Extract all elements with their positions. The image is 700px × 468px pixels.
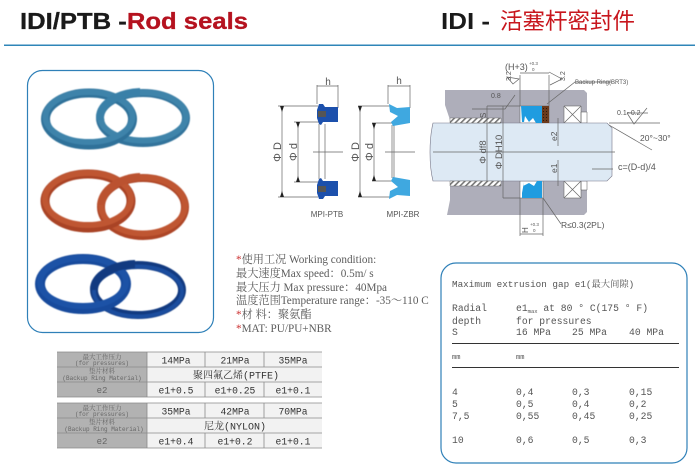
data rows: 0,15 — [629, 387, 652, 398]
row heads — [64, 403, 144, 447]
column heads: at 80 ° C(175 ° F) — [538, 303, 648, 314]
seal bottom — [522, 181, 542, 198]
row heads: e2 — [97, 386, 107, 396]
column heads: 40 MPa — [629, 327, 664, 338]
column heads: Radial — [452, 303, 487, 314]
seal section top — [317, 104, 338, 125]
row heads: (Backup Ring Material) — [64, 426, 144, 433]
bearing crosses — [564, 106, 581, 198]
data rows: 0,55 — [516, 411, 539, 422]
values: e1+0.1 — [276, 386, 311, 396]
seal section top — [389, 104, 410, 126]
values: 21MPa — [220, 356, 250, 366]
orange rings — [45, 173, 185, 236]
text block: working conditions: 最大压力 Max pressure：40Mpa — [236, 280, 387, 294]
dimension lines — [433, 73, 660, 236]
row heads: 最大工作压力 — [82, 403, 122, 412]
column heads: depth — [452, 316, 481, 327]
text block: working conditions: *使用工况 Working condition: — [236, 252, 376, 266]
column heads: 16 MPa — [516, 327, 551, 338]
dimension h: h — [325, 77, 331, 88]
label H: H — [521, 227, 530, 233]
values: e1+0.5 — [159, 386, 194, 396]
label surface: 0.1~0.2 — [617, 110, 641, 117]
data rows: 0,2 — [629, 399, 647, 410]
values: e1+0.4 — [159, 436, 194, 448]
values: 35MPa — [278, 356, 308, 366]
data rows: 7,5 — [452, 411, 470, 422]
title: Chinese: 活塞杆密封件 — [500, 9, 635, 34]
diagram: installation cross-section — [430, 61, 671, 236]
backup ring — [542, 106, 549, 123]
title: IDI/PTB Rod seals: IDI/PTB - Rod seals — [20, 8, 248, 34]
text block: working conditions: *MAT: PU/PU+NBR — [236, 323, 332, 335]
values — [159, 356, 311, 396]
tolerance lower: +0.3 — [530, 222, 539, 227]
data rows: 10 — [452, 435, 464, 446]
row heads: 垫片材料 — [89, 417, 116, 426]
values: 35MPa — [161, 406, 191, 418]
label df8: Φ df8 — [478, 140, 489, 164]
table rules — [452, 344, 679, 368]
teal rings — [46, 92, 186, 145]
dimension h: h — [396, 76, 402, 87]
data rows: 0,25 — [629, 411, 652, 422]
text block: working conditions: 最大速度Max speed：0.5m/ s — [236, 266, 374, 280]
column heads — [452, 303, 664, 362]
label e2: e2 — [549, 131, 559, 141]
data rows: 0,3 — [629, 435, 647, 446]
panel: maximum extrusion gap — [441, 263, 687, 463]
panel: seal ring photos — [28, 70, 214, 332]
finish 3.2 left: 3.2 — [506, 71, 513, 81]
dimension D: Φ D — [350, 142, 362, 162]
backup rings — [318, 111, 326, 192]
text block: working conditions — [236, 252, 429, 335]
column heads: max — [528, 308, 538, 315]
row heads — [62, 352, 142, 396]
column heads: mm — [452, 354, 460, 362]
row heads: (for pressures) — [75, 411, 129, 418]
table: PTFE backup ring — [57, 352, 322, 397]
text block: working conditions: 温度范围Temperature range：-35～110 C — [236, 293, 429, 307]
row heads: 最大工作压力 — [82, 352, 122, 361]
diagram: MPI-PTB seal — [272, 77, 343, 219]
label chamfer angle: 20°~30° — [640, 133, 671, 143]
tolerance lower zero: 0 — [533, 228, 536, 233]
seal section bottom — [389, 177, 410, 199]
label e1: e1 — [549, 163, 559, 173]
values: 聚四氟乙烯(PTFE) — [193, 368, 279, 382]
header rule — [4, 44, 695, 46]
table: nylon backup ring — [57, 403, 322, 448]
label radius: R≤0.3(2PL) — [561, 220, 605, 230]
dark blue rings — [40, 258, 182, 316]
label H+3: (H+3) — [505, 62, 528, 72]
values: 42MPa — [220, 406, 250, 418]
data rows: 0,3 — [572, 387, 590, 398]
data rows: 0,45 — [572, 411, 595, 422]
row heads: (for pressures) — [75, 360, 129, 367]
finish 3.2 right: 3.2 — [560, 71, 567, 81]
column heads: mm — [516, 354, 524, 362]
housing — [445, 90, 587, 215]
label: MPI-PTB — [311, 210, 343, 219]
dimension d: Φ d — [364, 143, 376, 161]
text block: working conditions: *材 料：聚氨酯 — [236, 307, 312, 321]
guide bushes — [450, 118, 501, 186]
column heads: for pressures — [516, 316, 592, 327]
data rows: 0,6 — [516, 435, 534, 446]
diagram: MPI-ZBR seal — [350, 76, 420, 219]
seal section bottom — [317, 178, 338, 199]
data rows: 0,4 — [516, 387, 534, 398]
dimension d: Φ d — [288, 143, 300, 161]
values: 14MPa — [161, 356, 191, 366]
row heads: (Backup Ring Material) — [62, 375, 142, 382]
tolerance zero: 0 — [532, 67, 535, 72]
column heads: e1 — [516, 303, 528, 314]
title: IDI: IDI - — [441, 8, 490, 34]
data rows — [452, 387, 652, 446]
tolerance: +0.3 — [529, 61, 538, 66]
data rows: 5 — [452, 399, 458, 410]
label S: S — [479, 113, 488, 118]
dimension D: Φ D — [272, 142, 284, 162]
data rows: 0,5 — [516, 399, 534, 410]
shaft — [430, 123, 612, 181]
values: e1+0.25 — [215, 386, 256, 396]
data rows: 4 — [452, 387, 458, 398]
grooves and bearing pocket — [520, 106, 587, 198]
column heads: S — [452, 327, 458, 338]
data rows: 0,4 — [572, 399, 590, 410]
label: MPI-ZBR — [387, 210, 420, 219]
values — [159, 406, 311, 448]
row heads: 垫片材料 — [89, 366, 116, 375]
label backup ring: Backup Ring(BRT3) — [575, 80, 628, 86]
row heads: e2 — [97, 437, 107, 447]
leader to corner — [543, 198, 561, 224]
label DH10: Φ DH10 — [494, 135, 505, 169]
values: e1+0.1 — [276, 436, 311, 448]
values: 70MPa — [278, 406, 308, 418]
values: 尼龙(NYLON) — [204, 420, 266, 434]
column heads: 25 MPa — [572, 327, 607, 338]
panel heading: Maximum extrusion gap e1(最大间隙) — [452, 278, 634, 290]
values: e1+0.2 — [218, 436, 253, 448]
label chamfer length: c=(D-d)/4 — [618, 162, 656, 172]
surface finish marks — [507, 72, 648, 124]
data rows: 0,5 — [572, 435, 590, 446]
seal top — [521, 106, 542, 123]
label 0.8: 0.8 — [491, 93, 501, 100]
